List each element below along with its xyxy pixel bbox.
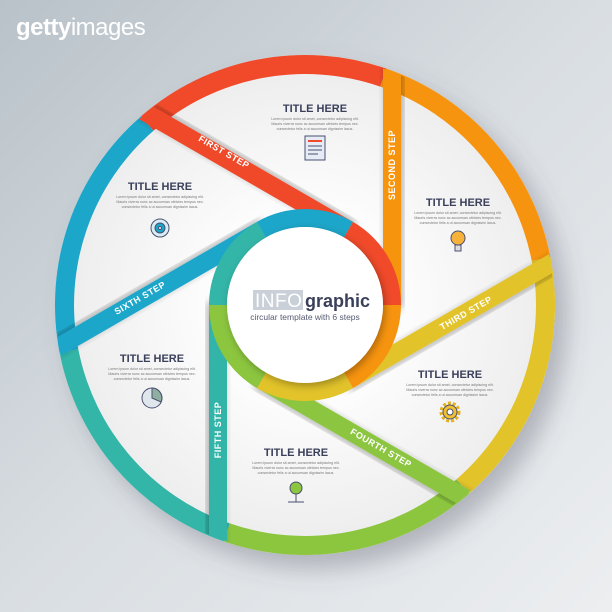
icon: document [305, 136, 325, 160]
inner arcs [185, 180, 425, 430]
body texts: Mauris viverra nunc ac accumsan ultricies tempus nec. [271, 122, 359, 126]
body texts [108, 117, 502, 475]
body texts: Lorem ipsum dolor sit amet, consectetur adipiscing elit. [108, 367, 196, 371]
step labels [113, 130, 494, 470]
titles [120, 103, 490, 459]
body texts: consectetur felis a ut accumsan dignissim lacus. [114, 377, 190, 381]
body texts: Mauris viverra nunc ac accumsan ultricies tempus nec. [406, 388, 494, 392]
watermark: gettyimages [16, 14, 146, 41]
step labels: FIRST STEP [197, 133, 251, 171]
main circle disc [55, 55, 555, 555]
body texts: Mauris viverra nunc ac accumsan ultricies tempus nec. [108, 372, 196, 376]
step labels: FOURTH STEP [349, 426, 413, 470]
strips [58, 68, 552, 542]
titles: TITLE HERE [426, 197, 490, 209]
center circle: INFO [255, 291, 302, 312]
icon: bulb [451, 231, 465, 251]
body texts: consectetur felis a ut accumsan dignissim lacus. [277, 127, 353, 131]
icon: target [151, 219, 169, 237]
body texts: consectetur felis a ut accumsan dignissim lacus. [420, 221, 496, 225]
step labels: SECOND STEP [387, 130, 397, 200]
body texts: consectetur felis a ut accumsan dignissim lacus. [122, 205, 198, 209]
center circle [227, 227, 383, 383]
body texts: Lorem ipsum dolor sit amet, consectetur adipiscing elit. [116, 195, 204, 199]
step labels: THIRD STEP [438, 294, 494, 332]
body texts: Lorem ipsum dolor sit amet, consectetur adipiscing elit. [252, 461, 340, 465]
titles: TITLE HERE [128, 181, 192, 193]
center circle: graphic [305, 291, 370, 311]
body texts: Mauris viverra nunc ac accumsan ultricies tempus nec. [116, 200, 204, 204]
body texts: Lorem ipsum dolor sit amet, consectetur adipiscing elit. [414, 211, 502, 215]
titles: TITLE HERE [283, 103, 347, 115]
body texts: Lorem ipsum dolor sit amet, consectetur adipiscing elit. [406, 383, 494, 387]
body texts: Mauris viverra nunc ac accumsan ultricies tempus nec. [252, 466, 340, 470]
center circle: circular template with 6 steps [250, 312, 360, 322]
body texts: consectetur felis a ut accumsan dignissim lacus. [412, 393, 488, 397]
body texts: Mauris viverra nunc ac accumsan ultricies tempus nec. [414, 216, 502, 220]
icon: pie chart [142, 388, 162, 408]
titles: TITLE HERE [418, 369, 482, 381]
body texts: consectetur felis a ut accumsan dignissim lacus. [258, 471, 334, 475]
titles: TITLE HERE [264, 447, 328, 459]
step labels: FIFTH STEP [213, 402, 223, 458]
body texts: Lorem ipsum dolor sit amet, consectetur adipiscing elit. [271, 117, 359, 121]
titles: TITLE HERE [120, 353, 184, 365]
step labels: SIXTH STEP [113, 279, 167, 317]
icon: gear [441, 403, 459, 421]
icon: money plant [288, 482, 304, 502]
